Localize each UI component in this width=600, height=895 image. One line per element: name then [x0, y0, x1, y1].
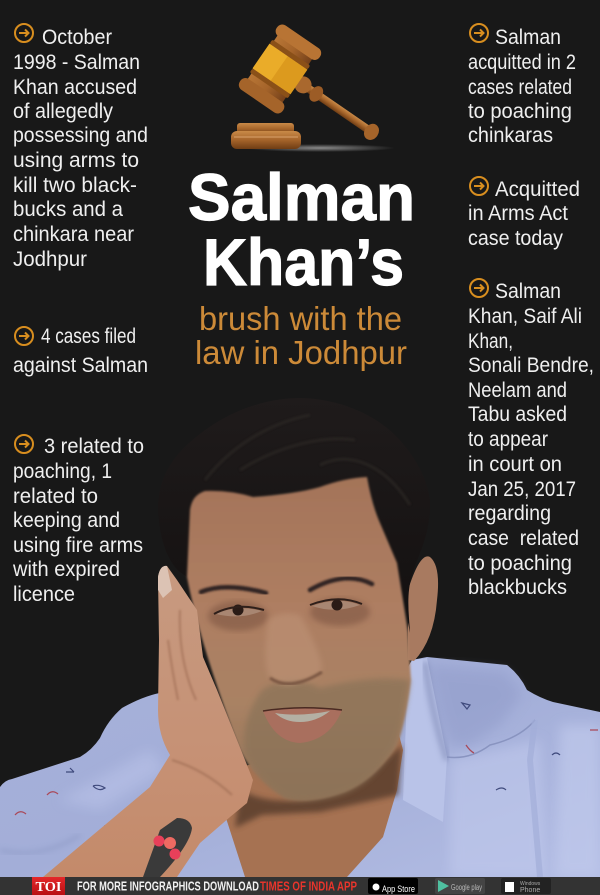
fact: asked to appear in court: case related	[468, 526, 579, 550]
shirt	[0, 657, 600, 877]
arm and hand	[43, 566, 253, 877]
fact: acquitted in Arms Act case: in Arms Act	[468, 201, 568, 225]
portrait: Salman Khan	[0, 398, 600, 877]
text block: right facts	[468, 24, 594, 599]
fact: acquitted in 2 cases: acquitted in 2	[468, 50, 576, 74]
fact: asked to appear in court: to appear	[468, 427, 548, 451]
logo: TOI: TOI	[36, 880, 62, 895]
mouth	[263, 708, 342, 743]
fact: asked to appear in court: blackbucks	[468, 575, 567, 599]
fact: 3 related to poaching	[12, 434, 144, 606]
fact: asked to appear in court	[468, 279, 594, 599]
eyes	[214, 599, 362, 616]
footer bar	[0, 877, 600, 895]
badge: App Store	[368, 878, 418, 894]
fact: 3 related to poaching: with expired	[12, 557, 120, 581]
fact: October 1998 accusation: possessing and	[13, 123, 148, 147]
badge: App Store: App Store	[382, 884, 415, 894]
fact: 3 related to poaching: poaching, 1	[13, 459, 112, 483]
fact: acquitted in Arms Act case	[468, 177, 580, 250]
fact: asked to appear in court: Neelam and	[468, 378, 567, 402]
fact: October 1998 accusation: of allegedly	[13, 99, 113, 123]
stubble	[244, 679, 410, 801]
fact: asked to appear in court: in court on	[468, 452, 562, 476]
subtitle	[195, 300, 407, 371]
fact: asked to appear in court: Khan, Saif Ali	[468, 304, 582, 328]
eyebrows	[201, 578, 372, 593]
fact: October 1998 accusation: bucks and a	[13, 197, 123, 221]
fact: October 1998 accusation: kill two black-	[13, 173, 137, 197]
fact: asked to appear in court: to poaching	[468, 551, 572, 575]
fact: asked to appear in court: Jan 25, 2017	[468, 477, 576, 501]
fact: October 1998 accusation	[13, 24, 148, 271]
fact: 3 related to poaching: using fire arms	[13, 533, 143, 557]
fact: 3 related to poaching: licence	[13, 582, 75, 606]
badge: Windows Phone	[501, 878, 551, 894]
fact: 4 cases filed: 4 cases filed	[41, 324, 136, 348]
fact: acquitted in Arms Act case: case today	[468, 226, 563, 250]
icon: gavel	[231, 22, 399, 168]
fact: asked to appear in court: Salman	[495, 279, 561, 303]
logo: TOI	[32, 877, 65, 895]
eye sockets	[208, 598, 370, 631]
subtitle: brush with the	[199, 300, 402, 337]
fact: October 1998 accusation: using arms to	[13, 148, 139, 172]
fact: 3 related to poaching: related to	[13, 484, 98, 508]
title: Khan’s	[203, 225, 404, 299]
fact: acquitted in 2 cases: chinkaras	[468, 123, 553, 147]
fact: acquitted in 2 cases: Salman	[495, 25, 561, 49]
title	[188, 160, 415, 299]
badge: Windows Phone: Phone	[520, 887, 540, 894]
text block: left facts	[12, 24, 148, 606]
microphone	[143, 818, 192, 877]
nose	[265, 613, 322, 685]
fact: October 1998 accusation: chinkara near	[13, 222, 134, 246]
fact: acquitted in 2 cases	[468, 24, 576, 147]
fact: 4 cases filed	[13, 324, 148, 377]
fact: October 1998 accusation: Khan accused	[13, 75, 137, 99]
footer call to action: FOR MORE INFOGRAPHICS DOWNLOAD	[77, 878, 259, 894]
face	[187, 477, 411, 800]
fact: asked to appear in court: Tabu asked	[468, 402, 567, 426]
fact: October 1998 accusation: October	[42, 25, 112, 49]
fact: 4 cases filed: against Salman	[13, 353, 148, 377]
fact: acquitted in Arms Act case: Acquitted	[495, 177, 580, 201]
badge: Google play	[435, 878, 485, 894]
badge: Windows Phone: Windows	[520, 881, 541, 887]
shirt motifs	[66, 703, 560, 828]
fact: October 1998 accusation: 1998 - Salman	[13, 50, 140, 74]
fact: asked to appear in court: Khan,	[468, 329, 513, 353]
fact: October 1998 accusation: Jodhpur	[13, 247, 87, 271]
ear	[408, 556, 438, 661]
footer call to action: TIMES OF INDIA APP	[260, 878, 357, 894]
subtitle: law in Jodhpur	[195, 334, 407, 371]
fact: 3 related to poaching: 3 related to	[44, 434, 144, 458]
collar	[403, 658, 447, 822]
fact: acquitted in 2 cases: cases related	[468, 75, 572, 99]
fact: asked to appear in court: regarding	[468, 501, 551, 525]
title: Salman	[188, 160, 415, 234]
fact: 3 related to poaching: keeping and	[13, 508, 120, 532]
badge: Google play: Google play	[451, 883, 482, 892]
hair	[158, 398, 430, 633]
fact: acquitted in 2 cases: to poaching	[468, 99, 572, 123]
neck	[225, 720, 403, 877]
